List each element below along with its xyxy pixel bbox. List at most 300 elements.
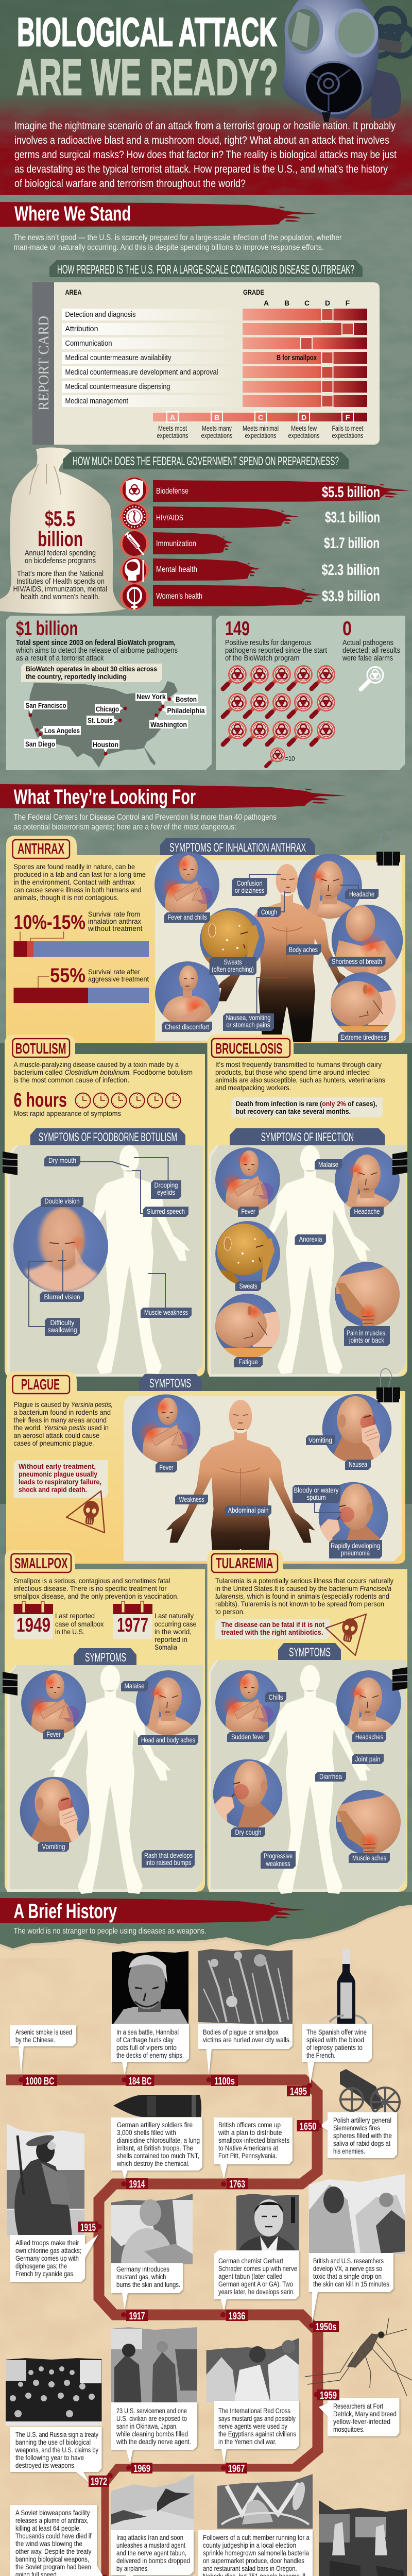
stamp: botulism: BOTULISM <box>15 1041 66 1057</box>
photo: skeleton pit <box>198 1949 293 2032</box>
report card title: REPORT CARD <box>36 316 52 411</box>
photo: Yemen Red Cross <box>206 2338 299 2402</box>
timeline date tags: 1969 <box>133 2463 150 2475</box>
label: Double vision: Double vision <box>44 1197 79 1205</box>
callout: pneumonic plague warning <box>13 1460 108 1498</box>
callout: bodies hurled: victims are hurled over city walls. <box>203 2036 291 2044</box>
connector <box>315 1503 341 1513</box>
label: Rash: Rash that develops <box>144 1851 193 1859</box>
bar: HIV/AIDS <box>153 506 380 528</box>
icon: vomiting <box>20 1777 89 1846</box>
label: Bloody or watery sputum: Bloody or watery <box>294 1486 339 1494</box>
calendar: 1949 <box>13 1601 53 1639</box>
callout: Germany mustard: mustard gas, which <box>116 2273 166 2281</box>
background: torn paper <box>0 1905 412 2576</box>
stat: 55% survival: 55% <box>50 964 85 987</box>
heading: federal spending <box>63 452 349 469</box>
text: brucellosis description: products, but those who spend time around infected <box>215 1068 370 1076</box>
icon: sweats <box>200 908 265 973</box>
figure: anthrax body <box>218 864 346 1042</box>
background: lower disease section <box>0 1504 412 1892</box>
label: Nausea <box>223 1013 274 1031</box>
stamp: plague: PLAGUE <box>21 1377 60 1393</box>
callout: Schrader <box>214 2250 299 2311</box>
grade legend: Meets many <box>202 425 232 432</box>
callout: treaty: destroyed its weapons. <box>15 2461 76 2469</box>
text: tularemia description: tularensis, which is found in animals (especially rodents and <box>215 1592 389 1600</box>
label: Sudden fever <box>227 1732 269 1742</box>
callout: German artillery: irritant, at British troops. The <box>117 2144 193 2152</box>
callout: death rate <box>232 1097 383 1117</box>
callout: allied chlorine: own chlorine gas attacks; <box>15 2246 81 2255</box>
label: Muscle aches <box>349 1853 390 1863</box>
icon: skull warning <box>326 1614 366 1655</box>
icon: syringe <box>120 530 149 557</box>
label: Pain in muscles: Pain in muscles, <box>347 1329 387 1337</box>
callout: arsenic smoke: Arsenic smoke is used <box>15 2028 72 2036</box>
label: Diarrhea: Diarrhea <box>319 1772 342 1781</box>
text: actual pathogens: Actual pathogens <box>342 638 393 647</box>
text: where we stand intro: The news isn’t good — the U.S. is scarcely prepared for a large-scale infection of the population, whether <box>13 233 342 242</box>
label: Weakness: Weakness <box>179 1495 204 1503</box>
photo: treaty signing <box>6 2358 102 2426</box>
icon: back pain <box>336 1790 401 1855</box>
label: Chest discomfort: Chest discomfort <box>165 1023 209 1031</box>
stamp: smallpox: SMALLPOX <box>14 1555 68 1572</box>
callout: Soviet facility: A Soviet bioweapons facility <box>15 2509 90 2517</box>
timeline date tags: 1495 <box>290 2086 307 2097</box>
callout: Iraq: and the nerve agent tabun, <box>116 2549 186 2557</box>
panel: botulism <box>3 1035 205 1377</box>
callout: British officers: Fort Pitt, Pennsylvania. <box>218 2151 277 2160</box>
text: pathogens intro <box>13 813 277 832</box>
photo: WWI soldier <box>7 2124 84 2236</box>
bar: women's health: $3.9 billion <box>322 588 380 605</box>
label: Blurred vision: Blurred vision <box>44 1293 80 1301</box>
stamp: smallpox <box>11 1554 71 1572</box>
label: Joint pain: Joint pain <box>355 1755 380 1763</box>
label: Muscle aches: Muscle aches <box>352 1854 386 1862</box>
label: Nausea: or stomach pains <box>227 1021 270 1029</box>
callout: salmonella: county judgeship in a local election <box>203 2541 296 2549</box>
label: Fever <box>238 1207 259 1217</box>
callout: Fort Detrick <box>319 2398 400 2436</box>
callout: BioWatch cities <box>21 664 162 682</box>
text: botulism description: bacterium called Clostridium botulinum. Foodborne botulism <box>13 1068 193 1076</box>
callout: German artillery <box>111 2117 202 2179</box>
column headings: GRADE <box>243 288 264 296</box>
callout: Hannibal <box>111 2024 189 2075</box>
callout: Hannibal: pots full of vipers onto <box>116 2043 177 2052</box>
callout: Yemen: says mustard gas and possibly <box>218 2414 296 2422</box>
bar: mental health: $2.3 billion <box>321 562 380 579</box>
callout: Yemen: in the Yemen civil war. <box>218 2437 277 2446</box>
icon: biodefense shield <box>120 477 149 503</box>
label: Dry mouth: Dry mouth <box>48 1156 76 1164</box>
icon: headache <box>335 1147 400 1212</box>
label: Drooping eyelids: eyelids <box>157 1188 175 1196</box>
stamp: brucellosis <box>212 1039 290 1057</box>
calendar: 1949: 1949 <box>16 1614 50 1636</box>
calendar: 1977: 1977 <box>117 1614 148 1636</box>
label: Cough: Cough <box>261 908 277 916</box>
label: Chest discomfort <box>162 1022 212 1032</box>
callout: arsenic smoke: by the Chinese. <box>15 2036 55 2044</box>
icon: skull warning <box>66 1491 105 1533</box>
callout: Fort Detrick: mosquitoes. <box>333 2425 365 2433</box>
bar: HIV/AIDS: $3.1 billion <box>325 509 380 526</box>
label: Slurred speech: Slurred speech <box>147 1207 185 1215</box>
connector lines <box>29 1158 168 1327</box>
text: botulism description: A muscle-paralyzing disease caused by a toxin made by a <box>13 1060 179 1069</box>
text: brucellosis description <box>215 1060 385 1092</box>
label: Malaise: Malaise <box>125 1682 145 1690</box>
callout: Yemen: The International Red Cross <box>218 2406 290 2415</box>
label: Head and body aches <box>138 1735 198 1745</box>
figure: white body <box>70 1146 189 1374</box>
label: Progressive weakness: Progressive <box>264 1852 293 1860</box>
panel: tularemia <box>207 1550 407 1893</box>
icon: fever <box>154 852 219 917</box>
bar: biodefense <box>153 480 410 502</box>
grade legend: A <box>170 413 175 421</box>
icon: mosquito <box>305 2318 412 2396</box>
callout: Schrader: Schrader comes up with nerve <box>218 2264 297 2273</box>
callout: treaty <box>10 2427 102 2482</box>
map: US cities: Boston <box>176 695 197 703</box>
callout: Iraq: by airplanes. <box>116 2564 149 2572</box>
text: anthrax description: animals, though it is not contagious. <box>13 893 118 902</box>
label: Confusion or dizziness: Confusion <box>237 879 263 887</box>
panel: BioWatch spending and map <box>6 616 212 770</box>
text: last natural case: occurring case <box>154 1620 197 1628</box>
callout: Okinawa: U.S. civilian are exposed to <box>116 2414 187 2422</box>
text: bag stat: HIV/AIDS, immunization, mental <box>13 585 107 594</box>
callout: allied chlorine <box>10 2234 98 2282</box>
photo: Hannibal bust <box>112 1951 188 2030</box>
label: Body aches: Body aches <box>289 945 318 954</box>
callout: pneumonic plague warning: pneumonic plague usually <box>19 1470 97 1478</box>
symptoms heading: SYMPTOMS <box>85 1651 126 1665</box>
callout: Germany mustard: burns the skin and lungs. <box>116 2280 180 2289</box>
icon: virus <box>120 503 149 530</box>
label: Fatigue: Fatigue <box>239 1358 258 1366</box>
callout: salmonella: and restaurant salad bars in Oregon. <box>203 2564 297 2572</box>
text: tularemia description: to person. <box>215 1607 245 1616</box>
label: Vomiting: Vomiting <box>308 1436 332 1444</box>
icon: sweats <box>215 1221 280 1286</box>
stat: 149: 149 <box>225 618 250 640</box>
timeline date tags: 1967 <box>228 2463 245 2475</box>
callout: disease can be fatal: The disease can be fatal if it is not <box>221 1620 324 1629</box>
text: smallpox description <box>13 1577 179 1600</box>
callout: treaty: The U.S. and Russia sign a treaty <box>15 2430 98 2438</box>
background: green to red header <box>0 0 412 195</box>
text: smallpox description: smallpox disease, and the only prevention is vaccination. <box>13 1592 179 1600</box>
icon: binder clip right <box>392 1667 407 1691</box>
timeline date tags: 1763 <box>229 2179 245 2190</box>
callout: allied chlorine: Allied troops make their <box>15 2239 79 2247</box>
callout: Fort Detrick: Detrick, Maryland breed <box>333 2410 397 2418</box>
text: last natural case: reported in <box>154 1635 187 1643</box>
map: US cities: Chicago <box>96 705 119 713</box>
stamp: anthrax <box>12 840 70 858</box>
map: US cities: Houston <box>93 740 118 749</box>
label: Drooping eyelids <box>151 1180 181 1199</box>
grade rows: Medical countermeasure availability <box>65 353 171 362</box>
text: bag stat: $5.5 <box>45 506 75 531</box>
grade legend: C <box>258 413 263 421</box>
intro text: of biological warfare and terrorism throughout the world? <box>14 178 246 190</box>
icon: blurred vision face <box>13 1201 108 1292</box>
callout: disease can be fatal <box>215 1619 330 1639</box>
callout: Yemen <box>214 2401 299 2464</box>
text: last reported: in the U.S. <box>55 1628 84 1636</box>
icon: white magnifier <box>360 667 383 689</box>
text: plague description: Plague is caused by Yersinia pestis, <box>13 1400 113 1409</box>
timeline date tags <box>19 2075 339 2576</box>
callout: Iraq <box>111 2530 194 2576</box>
text: tularemia description: rabbits). Tularemia is not known to be spread from person <box>215 1600 384 1608</box>
callout: Fort Detrick: yellow-fever-infected <box>333 2417 390 2426</box>
label: Drooping eyelids: Drooping <box>154 1181 178 1189</box>
callout: Spanish wine: The Spanish offer wine <box>306 2028 367 2036</box>
text: biowatch description: as a result of a terrorist attack <box>16 654 104 663</box>
icon: vomiting <box>322 1394 391 1463</box>
timeline path <box>6 2080 318 2576</box>
text: anthrax description <box>13 862 146 902</box>
legend: magnifier equals 10: =10 <box>285 754 295 762</box>
text: plague description: the world. Yersinia pestis used in <box>13 1423 109 1432</box>
photo: salmonella micrograph <box>217 2474 313 2529</box>
label: Shortness of breath: Shortness of breath <box>332 957 382 965</box>
text: pathogens intro: as potential bioterrorism agents; here are a few of the most dangerous: <box>13 823 236 832</box>
heading: A Brief History <box>0 1898 306 1923</box>
inner panel <box>155 860 402 1041</box>
grade legend <box>153 412 367 439</box>
label: Sweats <box>235 1281 261 1291</box>
icon: fever <box>21 1670 86 1735</box>
callout: VX: British and U.S. researchers <box>313 2257 384 2265</box>
label: Fever and chills: Fever and chills <box>168 913 207 921</box>
stat: 10-15% survival: 10%-15% <box>13 911 85 934</box>
column headings: AREA <box>65 288 81 296</box>
text: pathogens intro: The Federal Centers for Disease Control and Prevention list more than 40 pathogens <box>13 813 277 822</box>
icon: head and brain <box>120 557 149 584</box>
panel: anthrax <box>6 831 405 1043</box>
callout: Polish artillery: Polish artillery general <box>333 2116 391 2124</box>
callout: Hannibal: In a sea battle, Hannibal <box>116 2028 179 2036</box>
callout: VX: toxic that a single drop on <box>313 2272 382 2280</box>
grade legend: B <box>214 413 219 421</box>
label: Abdominal pain <box>225 1505 271 1516</box>
label: Blurred vision <box>40 1292 84 1302</box>
callout: salmonella: sprinkle homegrown salmonella bacteria <box>203 2549 309 2557</box>
text: smallpox description: Smallpox is a serious, contagious and sometimes fatal <box>13 1577 170 1585</box>
callout: pneumonic plague warning: Without early treatment, <box>19 1462 96 1470</box>
callout: Okinawa: while cleaning bombs filled <box>116 2430 188 2438</box>
label: Cough <box>258 907 281 917</box>
label: Nausea: Nausea <box>349 1460 367 1468</box>
grade legend: expectations <box>288 432 320 439</box>
icon: cough <box>213 1759 282 1828</box>
grade rows: Medical countermeasure development and approval <box>65 368 218 377</box>
callout: Soviet facility: the Soviet program had been <box>15 2563 91 2571</box>
inner panel <box>209 1660 406 1892</box>
grade rows: Communication <box>65 339 112 348</box>
symptom connector lines <box>249 874 358 1013</box>
label: Rapidly developing pneumonia <box>329 1540 382 1558</box>
text: biowatch description <box>15 638 178 663</box>
callout: British officers: with a plan to distribute <box>218 2128 282 2137</box>
label: Fatigue <box>234 1357 263 1367</box>
inner panel <box>209 1145 406 1377</box>
label: Malaise <box>315 1159 342 1170</box>
callout: Spanish wine: of leprosy patients to <box>306 2043 363 2052</box>
callout: VX <box>309 2253 393 2324</box>
text: brucellosis description: It’s most frequently transmitted to humans through dairy <box>215 1060 382 1069</box>
callout: allied chlorine: diphosgene gas; the <box>15 2262 67 2270</box>
biohazard watermark <box>365 8 412 56</box>
label: Weakness <box>175 1495 208 1504</box>
stat: 10-15% survival <box>13 910 149 957</box>
label: Dry cough <box>231 1827 265 1837</box>
callout: Hannibal: of Carthage hurls clay <box>116 2036 174 2044</box>
icon: binder clip left <box>3 1672 18 1696</box>
stat: 6 hours: 6 hours <box>13 1089 67 1111</box>
grade legend: Meets most <box>158 425 187 432</box>
inner panel <box>7 1145 203 1377</box>
label: Malaise <box>121 1681 148 1691</box>
callout: Yemen: nerve agents were used by <box>218 2422 287 2430</box>
text: brucellosis description: and meatpacking workers. <box>215 1083 291 1092</box>
icon: binder clip <box>376 832 400 866</box>
label: Pain in muscles <box>344 1326 390 1346</box>
symptoms heading <box>278 1643 341 1660</box>
column headings: B <box>284 299 289 307</box>
icon: artillery shell <box>113 2095 201 2117</box>
callout: Schrader: agent tabun (later called <box>218 2272 282 2280</box>
stat: $1 billion: $1 billion <box>16 618 78 640</box>
callout: BioWatch cities: the country, reportedly including <box>26 672 127 681</box>
background: disease panels section <box>0 1043 412 1504</box>
grade legend: F <box>346 413 350 421</box>
timeline date tags: 1000 BC <box>26 2076 55 2087</box>
callout: Iraq: Iraq attacks Iran and soon <box>116 2533 183 2541</box>
label: Headaches <box>352 1732 386 1742</box>
label: Nausea: Nausea, vomiting <box>226 1013 271 1022</box>
label: Dry cough: Dry cough <box>235 1828 262 1836</box>
bar: immunization <box>153 532 380 554</box>
callout: Soviet facility: Thousands could have died if <box>15 2532 92 2540</box>
grade legend: D <box>301 413 306 421</box>
label: Extreme tiredness: Extreme tiredness <box>340 1033 386 1041</box>
label: Headache: Headache <box>349 890 374 898</box>
bar: biodefense: Biodefense <box>156 487 188 496</box>
icon: tiredness <box>331 972 396 1037</box>
inner panel <box>7 1665 203 1892</box>
label: Sweats: Sweats <box>239 1282 258 1290</box>
text: where we stand intro: man-made or naturally occurring. And this is despite spending billions to improve response efforts. <box>13 243 323 252</box>
text: bag stat <box>13 506 107 601</box>
symptoms heading <box>74 1648 136 1665</box>
timeline date tags: 1959 <box>320 2390 337 2401</box>
text: plague description: their fleas in many areas around <box>13 1416 107 1424</box>
figure: white body <box>50 1666 170 1893</box>
label: Headache <box>350 1207 384 1217</box>
label: Fever <box>156 1462 177 1472</box>
callout: allied chlorine: Germany comes up with <box>15 2254 79 2262</box>
text: plague description <box>13 1400 113 1447</box>
text: anthrax description: Spores are found readily in nature, can be <box>13 862 135 871</box>
symptoms heading: SYMPTOMS <box>149 1377 191 1391</box>
map: US cities: St. Louis <box>88 716 113 724</box>
callout: German artillery: shells contained too much TNT, <box>117 2151 199 2160</box>
figure: plague body <box>166 1400 315 1551</box>
text: plague description: cases of pneumonic plague. <box>13 1439 94 1447</box>
callout: Spanish wine <box>302 2024 372 2086</box>
text: history intro: The world is no stranger to people using diseases as weapons. <box>13 1927 206 1936</box>
grade legend: Meets few <box>291 425 317 432</box>
icon: fever <box>132 1394 200 1463</box>
heading: Where We Stand: Where We Stand <box>14 202 131 225</box>
label: Anorexia: Anorexia <box>299 1235 322 1243</box>
icon: fever <box>215 1147 280 1212</box>
legend: magnifier equals 10 <box>266 748 295 766</box>
text: tularemia description: Tularemia is a potentially serious illness that occurs naturally <box>215 1577 393 1585</box>
callout: death rate: but recovery can take several months. <box>236 1107 351 1115</box>
callout: VX: the skin can kill in 15 minutes. <box>313 2280 391 2288</box>
photo: VX researchers <box>309 2174 405 2254</box>
inner panel <box>124 1396 402 1561</box>
photo: Matsumoto victims <box>319 2500 407 2576</box>
map: US cities: Philadelphia <box>167 706 205 715</box>
callout: bodies hurled <box>198 2024 293 2075</box>
text: plague description: a bacterium found in rodents and <box>13 1408 111 1416</box>
timeline date tags: 1914 <box>129 2179 145 2190</box>
heading: A Brief History: A Brief History <box>13 1900 117 1923</box>
bar: mental health: Mental health <box>156 565 197 574</box>
label: Rapidly developing pneumonia: pneumonia <box>341 1549 370 1557</box>
text: last natural case: Somalia <box>154 1643 177 1651</box>
callout: German artillery: which destroy the chemical. <box>116 2159 190 2167</box>
callout: British officers: to Native Americans at <box>218 2144 278 2152</box>
bar: immunization: $1.7 billion <box>324 535 380 552</box>
text: brucellosis description: animals are also susceptible, such as hunters, veterinarians <box>215 1076 385 1084</box>
grade rows: Attribution <box>65 325 98 333</box>
callout: Polish artillery <box>320 2112 397 2158</box>
callout: Iraq: unleashes a mustard agent <box>116 2541 185 2549</box>
icon: wine bottle <box>330 1949 367 2026</box>
bar: immunization: Immunization <box>156 539 196 548</box>
figure: white body <box>250 1146 370 1374</box>
label: Fever: Fever <box>160 1463 174 1471</box>
label: Dry mouth <box>44 1156 80 1166</box>
text: tularemia description <box>215 1577 393 1616</box>
label: Headache: Headache <box>354 1207 380 1215</box>
label: Muscle weakness <box>141 1308 192 1318</box>
text: actual pathogens <box>342 638 400 663</box>
icon: gas mask <box>282 0 403 122</box>
callout: German artillery: German artillery soldiers fire <box>117 2121 193 2129</box>
icon: binder clip left <box>3 1151 18 1175</box>
text: bag stat: Annual federal spending <box>25 549 96 557</box>
text: last reported: Last reported <box>55 1612 95 1620</box>
timeline date tags: 1950s <box>315 2321 337 2333</box>
label: Slurred speech <box>143 1207 188 1217</box>
pictogram: 150 magnifiers <box>223 666 335 744</box>
callout: Soviet facility: releases a plume of anthrax, <box>15 2516 89 2524</box>
